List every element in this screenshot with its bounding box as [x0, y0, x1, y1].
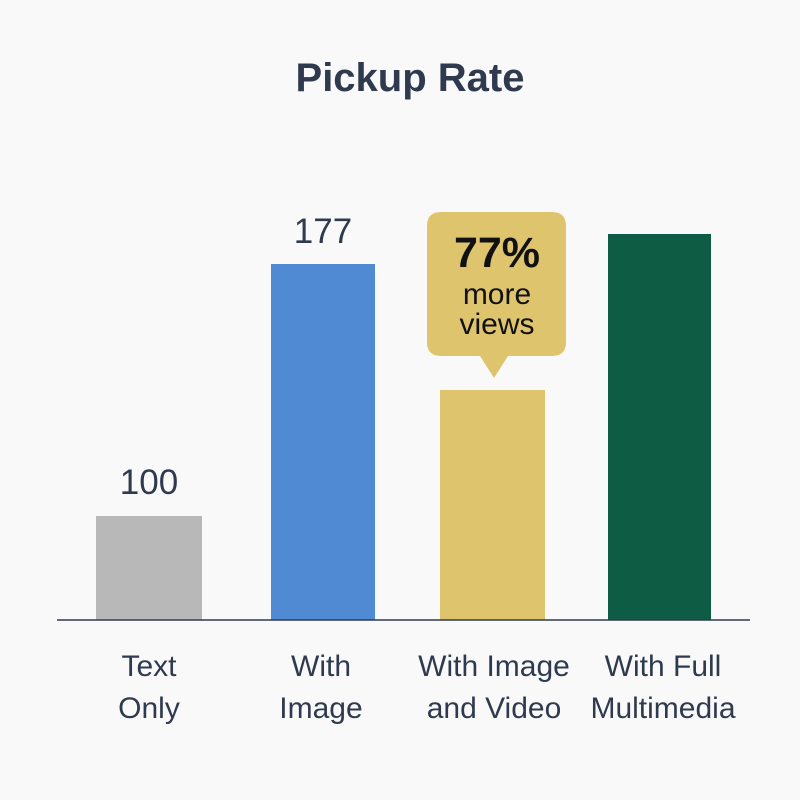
label: With Full Multimedia: With Full	[605, 650, 721, 683]
callout: 77% more views	[427, 212, 566, 378]
bar: With Image and Video	[440, 390, 545, 620]
value label 177: 177	[294, 212, 352, 251]
label: With Image and Video: and Video	[427, 692, 561, 725]
axis baseline	[57, 619, 750, 621]
label: With Full Multimedia: Multimedia	[590, 692, 736, 725]
callout: 77% more views: views	[459, 308, 535, 341]
label: With Image: With	[291, 650, 351, 683]
bar: With Full Multimedia	[608, 234, 711, 620]
callout: 77% more views: 77%	[454, 229, 540, 277]
title: Pickup Rate	[296, 56, 524, 100]
category labels	[118, 650, 736, 725]
label: Text Only: Only	[118, 692, 180, 725]
bar: Text Only	[96, 516, 202, 620]
label: With Image and Video: With Image	[418, 650, 570, 683]
bar: With Image	[271, 264, 375, 620]
label: With Image: Image	[279, 692, 363, 725]
bar chart	[57, 212, 750, 620]
callout: 77% more views: more	[463, 278, 531, 311]
label: Text Only: Text	[121, 650, 177, 683]
value label 100: 100	[120, 463, 178, 502]
